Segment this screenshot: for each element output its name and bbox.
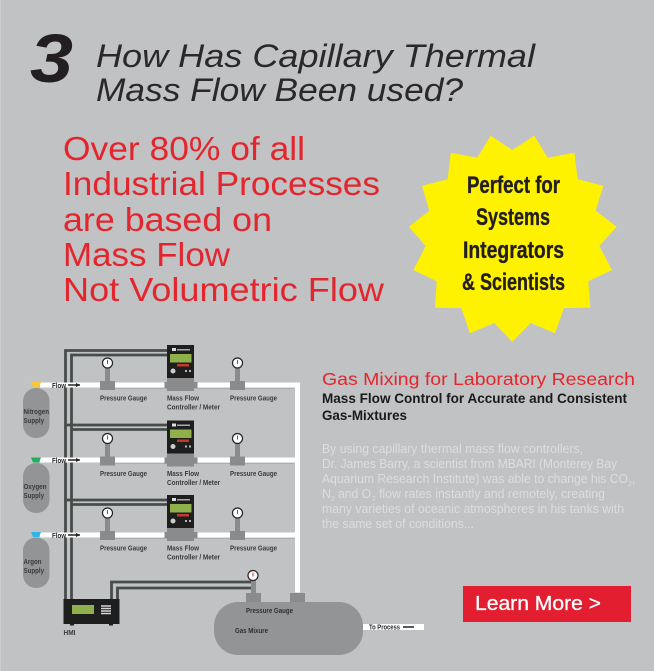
headline: mass flow statistic: are based on	[63, 201, 272, 238]
body text	[322, 442, 635, 531]
body text: flow rates instantly and remotely, creating	[379, 487, 605, 501]
body text: the same set of conditions...	[322, 517, 474, 531]
starburst callout: Systems	[476, 204, 550, 231]
title	[96, 38, 536, 108]
headline: mass flow statistic: Over 80% of all	[63, 130, 305, 167]
body text: 2	[628, 481, 632, 488]
labels: Mass Flow	[167, 544, 199, 552]
oxygen supply tank: Supply	[24, 493, 44, 500]
gas mixture tank: Gas Mixure	[235, 626, 268, 635]
body text: 2	[331, 496, 335, 503]
headline: mass flow statistic	[63, 130, 384, 308]
labels: Pressure Gauge	[100, 544, 147, 552]
labels	[100, 544, 277, 562]
subheading: Mass Flow Control for Accurate and Consistent	[322, 391, 627, 406]
flow diagram	[23, 345, 424, 655]
nitrogen supply tank: Supply	[24, 418, 44, 425]
labels: Controller / Meter	[167, 552, 220, 562]
flow labels: Flow	[52, 531, 66, 540]
body text: ,	[632, 472, 635, 486]
labels: Pressure Gauge	[230, 544, 277, 552]
nitrogen supply tank	[23, 382, 50, 438]
labels: Controller / Meter	[167, 402, 220, 412]
gas mixture tank: Pressure Gauge	[246, 606, 293, 615]
mass flow controller	[164, 345, 198, 391]
gauge	[230, 508, 245, 540]
gauge	[230, 358, 245, 390]
title number: 3	[30, 20, 73, 97]
body text: N	[322, 487, 331, 501]
HMI unit	[64, 599, 120, 637]
argon supply tank: Argon	[24, 559, 42, 566]
flow labels: Flow	[52, 456, 66, 465]
labels: Pressure Gauge	[230, 394, 277, 402]
HMI unit: HMI	[64, 628, 76, 637]
learn more button: Learn More >	[475, 593, 601, 615]
flow labels	[52, 381, 80, 540]
argon supply tank	[23, 532, 50, 588]
gauge	[100, 434, 115, 466]
starburst callout: Perfect for	[467, 172, 560, 199]
headline: mass flow statistic: Industrial Processes	[63, 165, 380, 202]
gauge	[230, 434, 245, 466]
control cables	[66, 350, 251, 600]
labels: Mass Flow	[167, 394, 199, 402]
gauge	[100, 358, 115, 390]
mass flow controller	[164, 495, 198, 541]
mass flow controller	[164, 420, 198, 466]
body text: and O	[338, 487, 371, 501]
subheading: Gas-Mixtures	[322, 408, 407, 423]
to process label: To Process	[369, 622, 400, 632]
gas mixture tank	[214, 570, 363, 655]
learn more button	[463, 586, 631, 622]
oxygen supply tank	[23, 458, 50, 513]
starburst callout	[409, 136, 617, 342]
labels: Pressure Gauge	[230, 469, 277, 478]
headline: mass flow statistic: Not Volumetric Flow	[63, 271, 384, 308]
oxygen supply tank: Oxygen	[24, 484, 46, 491]
nitrogen supply tank: Nitrogen	[24, 409, 49, 416]
body text: many varieties of oceanic atmospheres in his tanks with	[322, 502, 624, 516]
labels	[100, 394, 277, 412]
title: How Has Capillary Thermal	[96, 38, 536, 74]
row 1 components	[100, 345, 277, 412]
flow labels: Flow	[52, 381, 66, 390]
labels: Controller / Meter	[167, 478, 220, 487]
row 2 components	[100, 420, 277, 487]
argon supply tank: Supply	[24, 568, 44, 575]
section heading: Gas Mixing for Laboratory Research	[322, 369, 635, 389]
body text: Dr. James Barry, a scientist from MBARI (Monterey Bay	[322, 457, 618, 471]
starburst callout: Integrators	[463, 237, 564, 264]
labels: Mass Flow	[167, 469, 199, 478]
body text: 2	[372, 496, 376, 503]
subheading	[322, 391, 627, 423]
body text: Aquarium Research Institute) was able to change his CO	[322, 472, 628, 486]
labels: Pressure Gauge	[100, 469, 147, 478]
title: Mass Flow Been used?	[96, 72, 463, 108]
labels: Pressure Gauge	[100, 394, 147, 402]
labels	[100, 469, 277, 487]
body text: By using capillary thermal mass flow controllers,	[322, 442, 583, 456]
flow pipes	[40, 382, 424, 630]
gauge	[100, 508, 115, 540]
headline: mass flow statistic: Mass Flow	[63, 236, 230, 273]
starburst callout: & Scientists	[462, 269, 565, 296]
row 3 components	[100, 495, 277, 562]
